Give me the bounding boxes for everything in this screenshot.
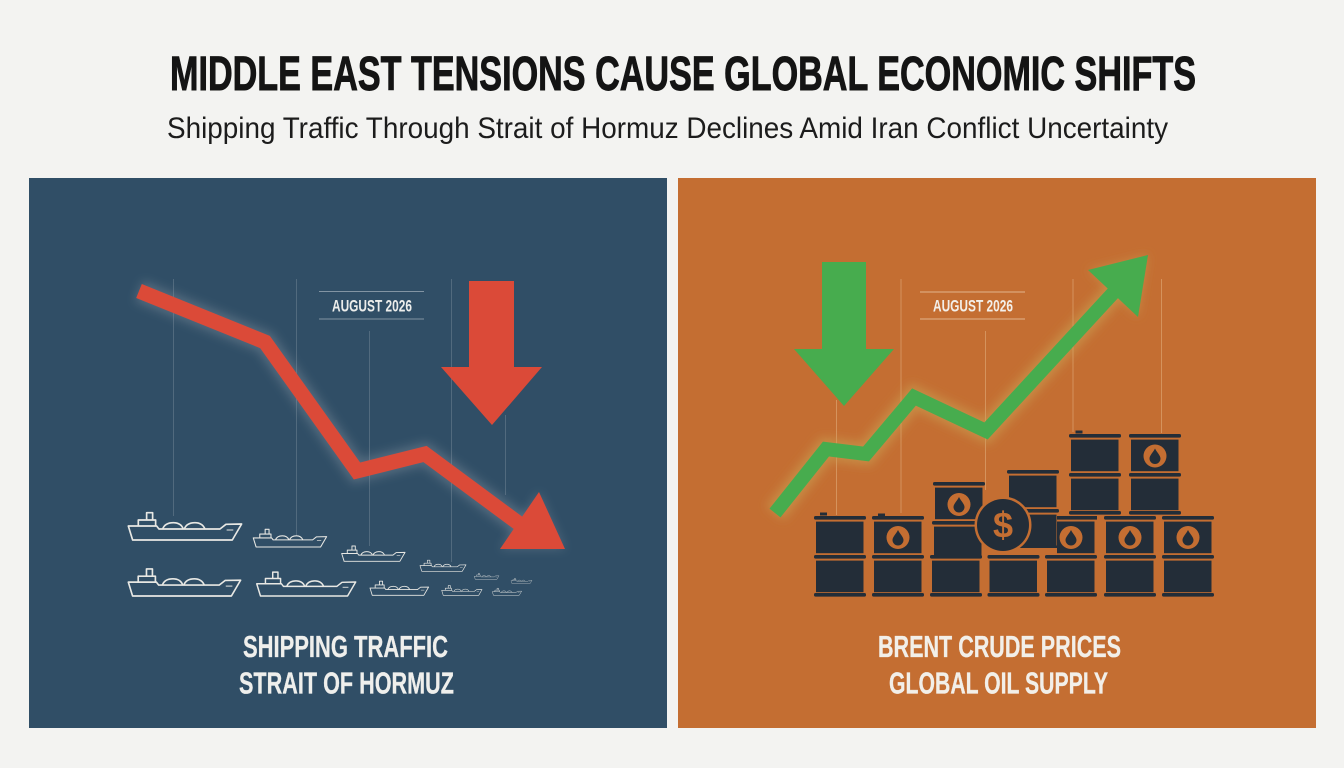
date tag: August 2026: AUGUST 2026 (332, 298, 412, 316)
oil drop emblems (886, 444, 1200, 549)
panel label (239, 629, 454, 700)
panel: shipping traffic (29, 178, 667, 728)
date tag: August 2026: AUGUST 2026 (933, 298, 1013, 316)
icon: big green down arrow (794, 262, 894, 406)
panel label: BRENT CRUDE PRICES (878, 629, 1121, 664)
bottom row of barrels (814, 516, 1214, 597)
chart guide lines (836, 279, 1162, 515)
icon: dollar coin: $ (993, 504, 1013, 546)
date tag: August 2026 (920, 292, 1025, 319)
falling line chart with arrowhead (139, 291, 565, 549)
top stacked barrels (1069, 434, 1181, 515)
icon: big red down arrow (441, 281, 542, 425)
panel background: navy (29, 178, 667, 728)
rising line chart with arrowhead (775, 255, 1148, 513)
panel label (878, 629, 1121, 700)
barrel caps (820, 430, 1082, 516)
icon: stacked oil barrels (814, 430, 1214, 597)
panel background: orange (678, 178, 1316, 728)
subtitle: Shipping Traffic Through Strait of Hormuz Declines Amid Iran Conflict Uncertainty (167, 112, 1168, 145)
chart guide lines (174, 279, 506, 562)
panel label: GLOBAL OIL SUPPLY (889, 666, 1108, 700)
panel label: SHIPPING TRAFFIC (243, 629, 448, 664)
panel: brent crude (678, 178, 1316, 728)
icon: dollar coin (974, 496, 1032, 554)
panel label: STRAIT OF HORMUZ (239, 666, 454, 700)
icon: fleet of ships shrinking (128, 513, 532, 596)
date tag: August 2026 (319, 292, 424, 319)
second-level barrels (932, 470, 1097, 558)
